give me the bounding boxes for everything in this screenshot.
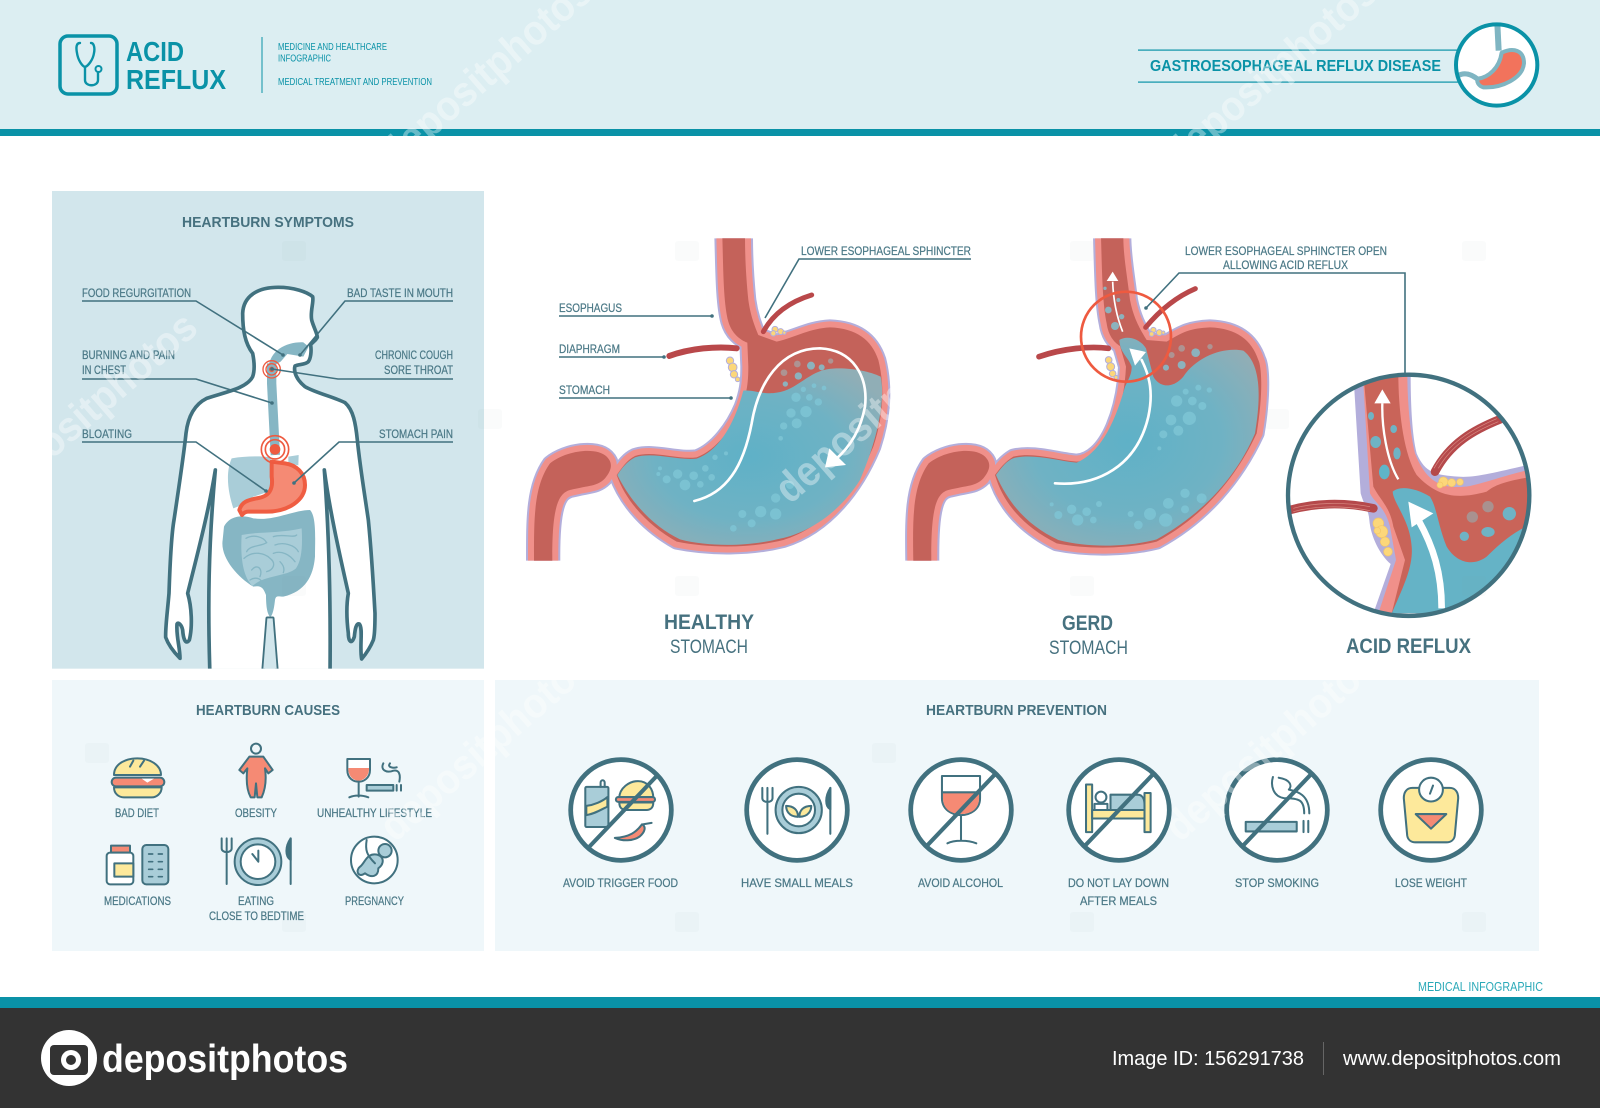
callout: lower esophageal sphincter: [765, 244, 971, 318]
caption: healthy stomach: STOMACH: [670, 637, 748, 658]
fat deposits: [726, 326, 786, 382]
cause labels: EATING: [238, 894, 274, 908]
icon: obesity: [239, 744, 273, 797]
caption: healthy stomach: HEALTHY: [664, 611, 754, 634]
icon: burger: [112, 758, 164, 797]
callout: chronic cough: CHRONIC COUGH: [375, 348, 453, 362]
callout: bloating: [82, 427, 268, 493]
prevention labels: [563, 876, 1468, 908]
icon: medications: [107, 845, 168, 884]
callout: sphincter open: LOWER ESOPHAGEAL SPHINCTER OPEN: [1185, 244, 1387, 258]
title: acid reflux: ACID: [126, 36, 184, 67]
panel: heartburn symptoms: [52, 191, 484, 677]
callout: chronic cough: SORE THROAT: [384, 363, 454, 377]
icon: stethoscope logo: [60, 36, 117, 94]
logo: depositphotos: depositphotos: [102, 1038, 348, 1081]
prevention labels: AFTER MEALS: [1080, 894, 1157, 908]
bubbles: [656, 358, 833, 532]
organ: large intestine: [222, 510, 315, 617]
watermark: depositphotos repeats: [0, 0, 1386, 850]
header subtitle: MEDICAL TREATMENT AND PREVENTION: [278, 76, 432, 88]
cause labels: PREGNANCY: [345, 894, 404, 908]
cause labels: BAD DIET: [115, 806, 160, 820]
callout: diaphragm: [559, 342, 666, 359]
callouts: healthy stomach: [559, 244, 971, 400]
cause icons: [107, 744, 401, 885]
cause labels: [104, 806, 432, 923]
diaphragm: [669, 295, 812, 356]
callout: stomach pain: [292, 427, 453, 485]
bubbles: [1050, 287, 1213, 529]
callout: stomach: [559, 383, 733, 400]
cause labels: CLOSE TO BEDTIME: [209, 909, 304, 923]
illustration: acid reflux magnified: [1288, 373, 1543, 616]
watermark: depositphotos repeats: depositphotos: [370, 640, 601, 850]
title: acid reflux: REFLUX: [126, 64, 226, 95]
callout: sphincter open: ALLOWING ACID REFLUX: [1223, 258, 1348, 272]
icon: chest burn target: [261, 436, 289, 463]
cause labels: UNHEALTHY LIFESTYLE: [317, 806, 432, 820]
heading: heartburn symptoms: HEARTBURN SYMPTOMS: [182, 214, 354, 231]
heading: prevention: HEARTBURN PREVENTION: [926, 702, 1107, 719]
icon: have small meals: [747, 760, 847, 860]
icon: lose weight: [1381, 760, 1481, 860]
icon: pregnancy: [351, 837, 398, 883]
footer teal bar: [0, 997, 1600, 1008]
callout: burning and pain: [82, 348, 274, 405]
arrow: acid up stomach: [1055, 348, 1151, 484]
header subtitle: MEDICINE AND HEALTHCARE: [278, 41, 387, 53]
callout: burning and pain: BURNING AND PAIN: [82, 348, 175, 362]
panel: heartburn prevention: [495, 680, 1539, 951]
circle outline: [1288, 375, 1529, 616]
panel background: [52, 191, 484, 669]
circle background: [1288, 375, 1529, 616]
callout: food regurgitation: [82, 286, 285, 357]
body silhouette: [166, 287, 375, 677]
icon: header stomach badge: [1455, 23, 1537, 106]
callout: bad taste: [298, 286, 453, 357]
caption: healthy stomach: [664, 611, 754, 658]
callout: burning and pain: IN CHEST: [82, 363, 127, 377]
prevention labels: LOSE WEIGHT: [1395, 876, 1468, 890]
organ: liver: [228, 455, 299, 508]
callout: esophagus: ESOPHAGUS: [559, 301, 622, 315]
cause labels: MEDICATIONS: [104, 894, 171, 908]
stomach wall: [913, 237, 1261, 563]
callout: esophagus: [559, 301, 714, 318]
callout: stomach pain: STOMACH PAIN: [379, 427, 453, 441]
watermark: depositphotos repeats: depositphotos: [1155, 640, 1386, 850]
stomach wall: [534, 237, 882, 563]
organ: stomach: [239, 462, 305, 515]
header subtitle: [262, 37, 432, 93]
title: acid reflux: [126, 36, 226, 95]
callouts: symptoms: [82, 286, 454, 493]
panel background: [495, 680, 1539, 951]
image id and site: www.depositphotos.com: [1342, 1048, 1561, 1070]
panel background: [52, 680, 484, 951]
icon: do not lay down: [1069, 760, 1169, 860]
caption: acid reflux: ACID REFLUX: [1346, 635, 1471, 658]
watermark: camera marks: [85, 241, 1486, 932]
anatomy: [1290, 373, 1543, 613]
panel: heartburn causes: [52, 680, 484, 951]
caption: GERD stomach: STOMACH: [1049, 638, 1128, 659]
callout: sphincter open: [1144, 244, 1405, 376]
callout: bad taste: BAD TASTE IN MOUTH: [347, 286, 453, 300]
header disease label: GASTROESOPHAGEAL REFLUX DISEASE: [1150, 58, 1441, 75]
watermark: depositphotos repeats: depositphotos: [765, 302, 996, 512]
illustration: GERD stomach: [913, 237, 1261, 563]
footer label: MEDICAL INFOGRAPHIC: [1418, 979, 1543, 994]
illustration: healthy stomach: [534, 237, 882, 563]
prevention labels: AVOID ALCOHOL: [918, 876, 1003, 890]
icon: throat burn target: [263, 361, 280, 378]
caption: GERD stomach: GERD: [1062, 612, 1113, 635]
image id and site: [1112, 1042, 1561, 1075]
callout: stomach: STOMACH: [559, 383, 610, 397]
caption: GERD stomach: [1049, 612, 1128, 659]
footer dark band: [0, 1008, 1600, 1108]
arrow: acid up esophagus: [1107, 272, 1123, 332]
logo: depositphotos: [41, 1030, 348, 1086]
prevention labels: AVOID TRIGGER FOOD: [563, 876, 678, 890]
icon: stop smoking: [1227, 760, 1327, 860]
callout: bloating: BLOATING: [82, 427, 132, 441]
header subtitle: INFOGRAPHIC: [278, 52, 331, 64]
cause labels: OBESITY: [235, 806, 277, 820]
icon: avoid alcohol: [911, 760, 1011, 860]
callout: chronic cough: [270, 348, 454, 379]
organ: esophagus and mouth: [268, 342, 309, 455]
gastric fluid: [617, 368, 882, 545]
heading: causes: HEARTBURN CAUSES: [196, 702, 340, 719]
prevention labels: DO NOT LAY DOWN: [1068, 876, 1169, 890]
callout: food regurgitation: FOOD REGURGITATION: [82, 286, 191, 300]
icon: avoid trigger food: [571, 760, 671, 860]
image id and site: Image ID: 156291738: [1112, 1048, 1304, 1070]
icon: clock plate: [222, 838, 291, 885]
highlight circle: [1081, 292, 1171, 382]
arrow: food path: [694, 348, 865, 501]
callout: lower esophageal sphincter: LOWER ESOPHAGEAL SPHINCTER: [801, 244, 971, 258]
icon: wine and cigarette: [347, 759, 401, 797]
gastric fluid: [996, 338, 1259, 546]
fat deposits: [1105, 327, 1165, 379]
prevention labels: STOP SMOKING: [1235, 876, 1319, 890]
callout: diaphragm: DIAPHRAGM: [559, 342, 620, 356]
prevention labels: HAVE SMALL MEALS: [741, 876, 853, 890]
diaphragm: [1039, 289, 1195, 357]
header band: [0, 0, 1600, 136]
